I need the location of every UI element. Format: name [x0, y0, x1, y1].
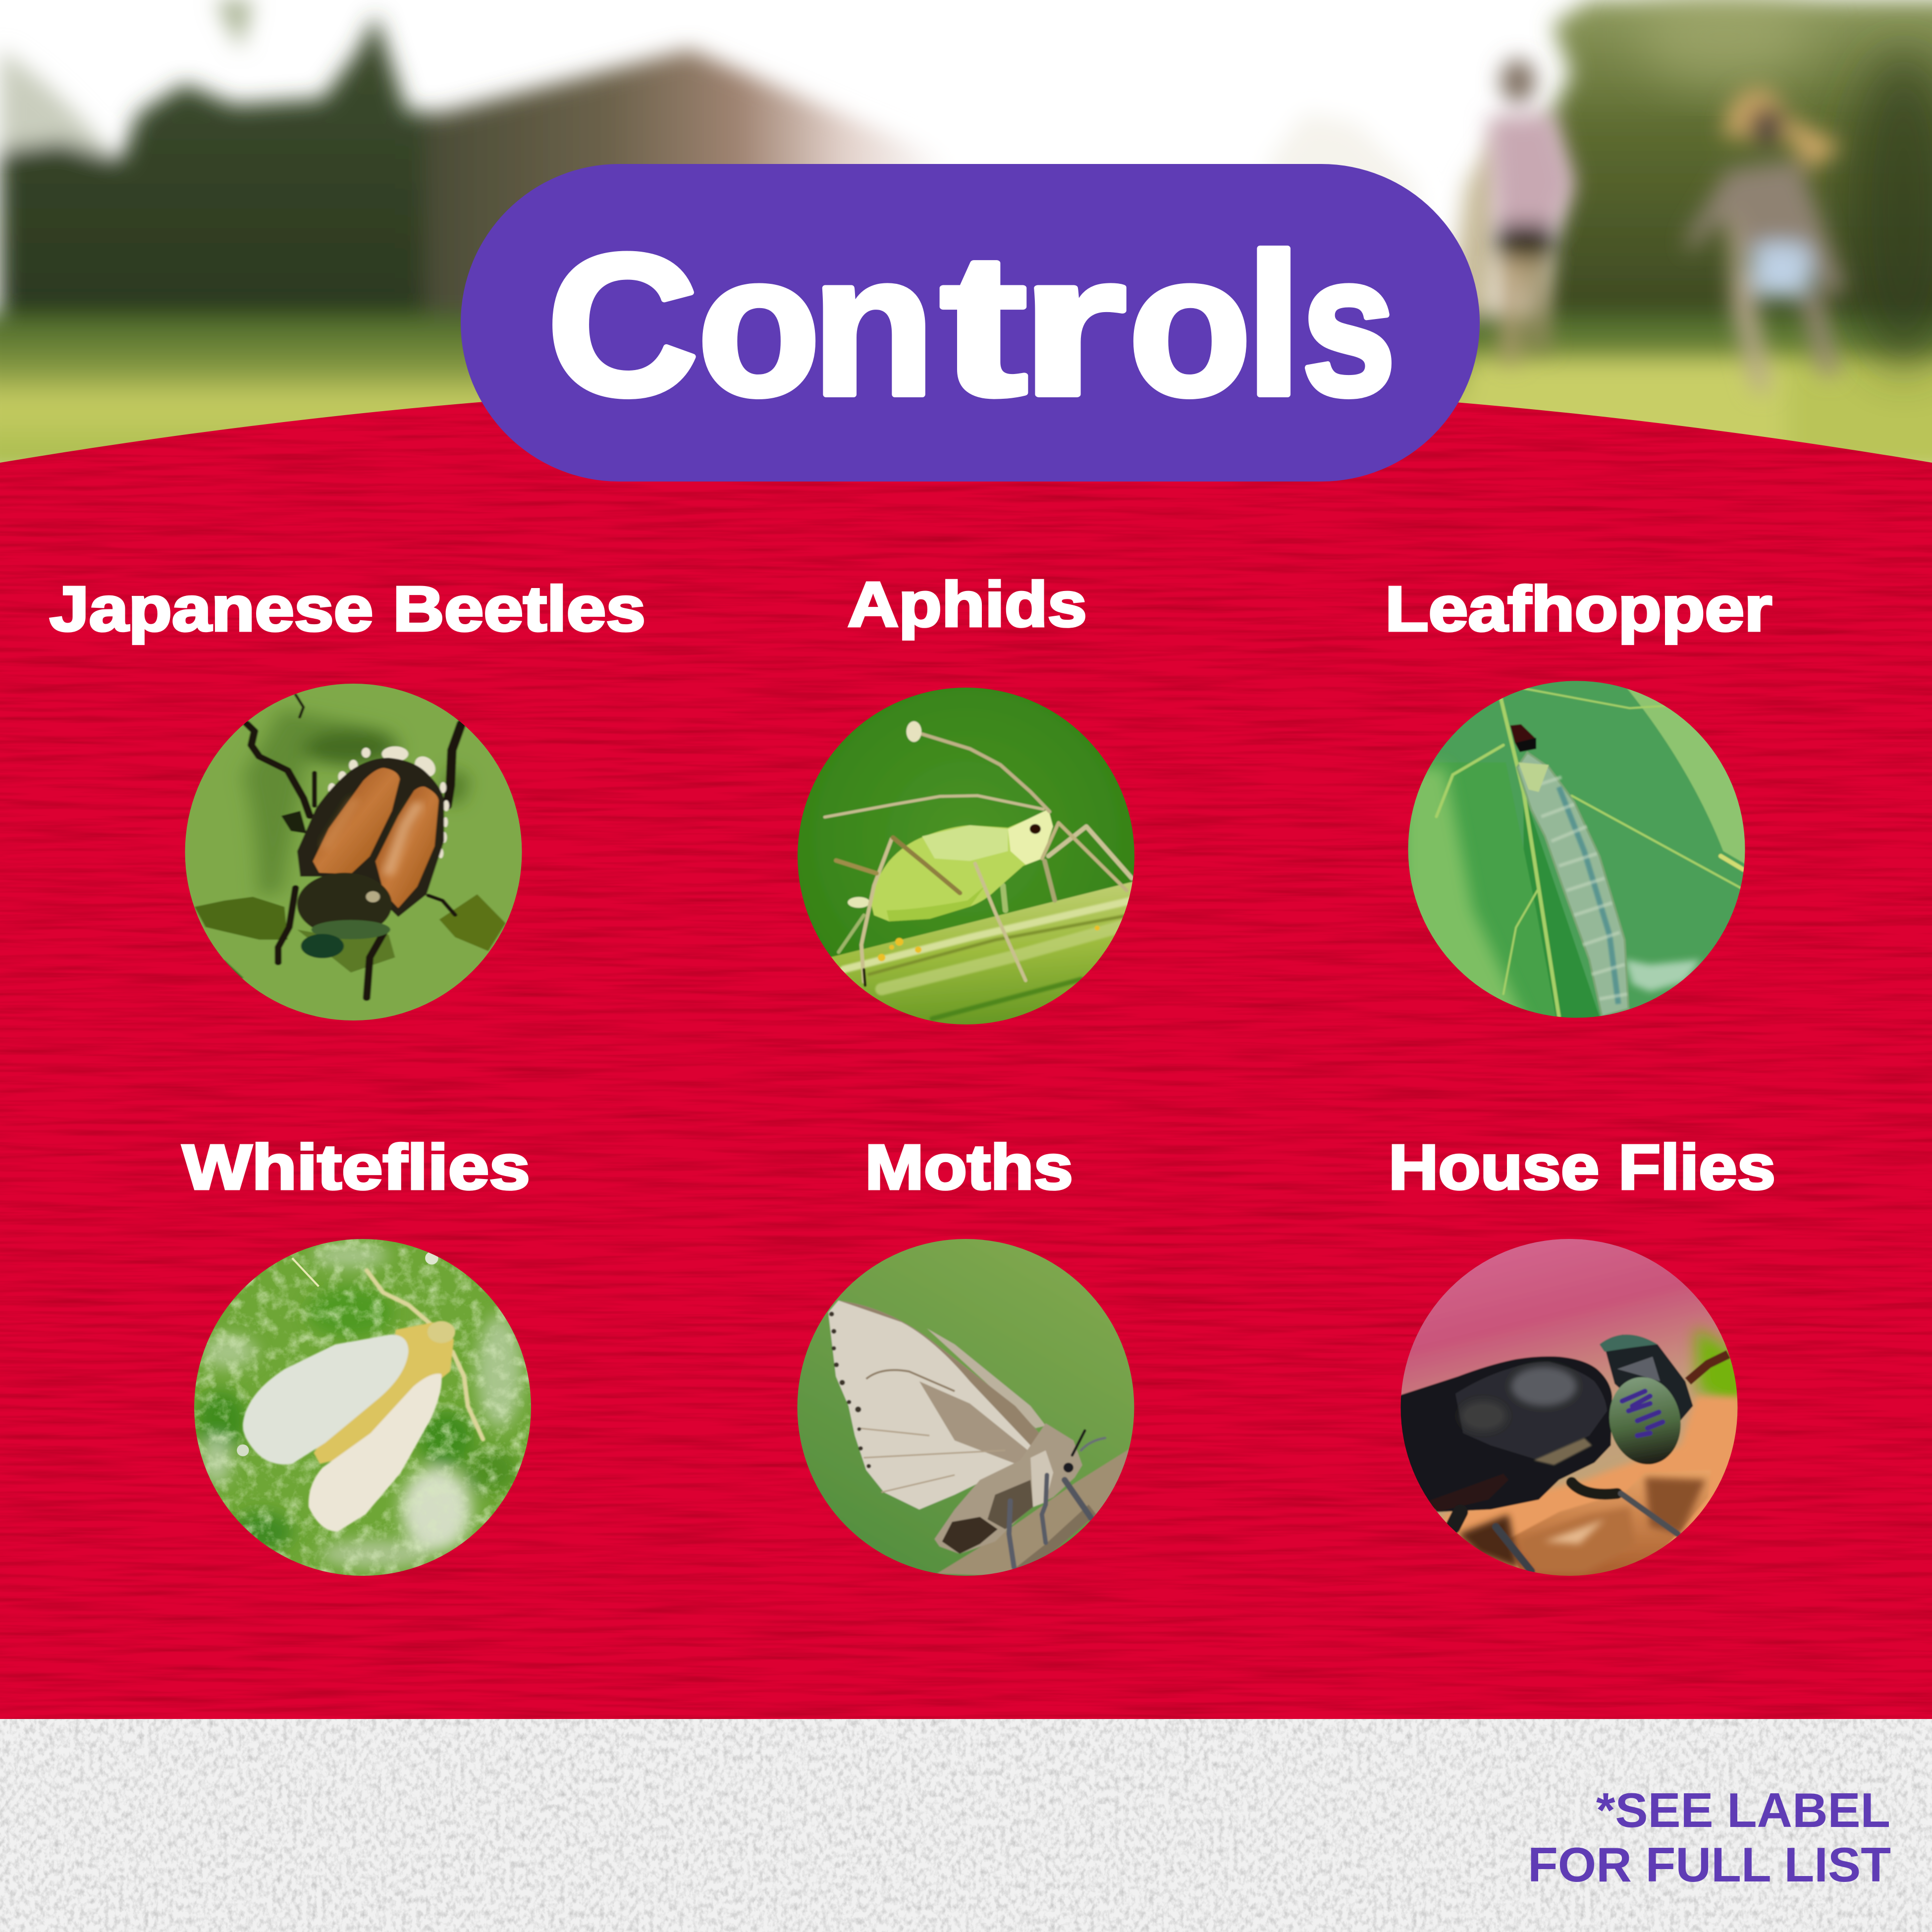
- title text: C: [547, 213, 698, 437]
- panel: grey plaster footer: [0, 1719, 1932, 1932]
- heading: Moths: Moths: [865, 1132, 1073, 1203]
- legs: [1453, 1482, 1678, 1571]
- yellow pollen: [878, 925, 1100, 961]
- background photo: children running on a lawn: [0, 0, 1932, 475]
- rock: [1443, 1396, 1741, 1581]
- footnote line 1: *SEE LABEL: [1596, 1783, 1890, 1837]
- heading: Whiteflies: Whiteflies: [182, 1132, 530, 1203]
- aphid legs & antennae: [825, 721, 1127, 985]
- compound eye: [1602, 1372, 1688, 1470]
- title text: l: [1246, 213, 1302, 437]
- caterpillar body: [1517, 752, 1628, 1016]
- title text: o: [1128, 213, 1251, 437]
- antennae: [367, 1271, 483, 1439]
- aphid legs behind: [839, 826, 1132, 952]
- photo: whitefly on fuzzy leaf: [168, 1219, 575, 1615]
- photo: moth on twig: [773, 1219, 1179, 1615]
- title text: o: [698, 213, 820, 437]
- photo: green aphid on stem: [763, 659, 1169, 1055]
- moth legs and antennae: [1009, 1431, 1105, 1567]
- heading: Aphids: Aphids: [848, 569, 1087, 640]
- legs: [247, 695, 461, 998]
- title pill: [461, 164, 1480, 482]
- white tufts: [328, 747, 449, 859]
- title text: r: [1020, 213, 1127, 437]
- antenna: [1688, 1354, 1728, 1381]
- stem: [826, 881, 1137, 1028]
- tree shade and bokeh: [1639, 0, 1932, 370]
- heading: House Flies: House Flies: [1389, 1132, 1775, 1203]
- head: [1605, 1335, 1693, 1421]
- aphid body: [870, 809, 1053, 921]
- rear wing edge: [927, 1328, 1046, 1428]
- title text: t: [940, 213, 1027, 437]
- body: [314, 1322, 454, 1464]
- heading: Japanese Beetles: Japanese Beetles: [50, 574, 645, 644]
- whitefly: [243, 1271, 483, 1532]
- wing edge dots: [829, 1312, 871, 1468]
- children silhouettes: [1489, 59, 1846, 392]
- footnote line 2: FOR FULL LIST: [1528, 1837, 1891, 1892]
- title text: n: [812, 213, 935, 437]
- photo: house fly on rock: [1377, 1219, 1783, 1615]
- title text: s: [1301, 213, 1396, 437]
- twig: [937, 1449, 1136, 1576]
- footnote: [1528, 1783, 1891, 1892]
- wings: [243, 1335, 408, 1464]
- photo: Japanese beetle on chewed leaf: [185, 684, 522, 1020]
- photo: leafhopper larva on leaf: [1382, 659, 1788, 1055]
- heading: Leafhopper: Leafhopper: [1385, 574, 1772, 644]
- furry body: [934, 1423, 1082, 1554]
- moth wings: [828, 1300, 1046, 1509]
- beetle body: [297, 758, 444, 917]
- body: [1397, 1356, 1612, 1512]
- panel: red painted wood section: [0, 297, 1932, 1724]
